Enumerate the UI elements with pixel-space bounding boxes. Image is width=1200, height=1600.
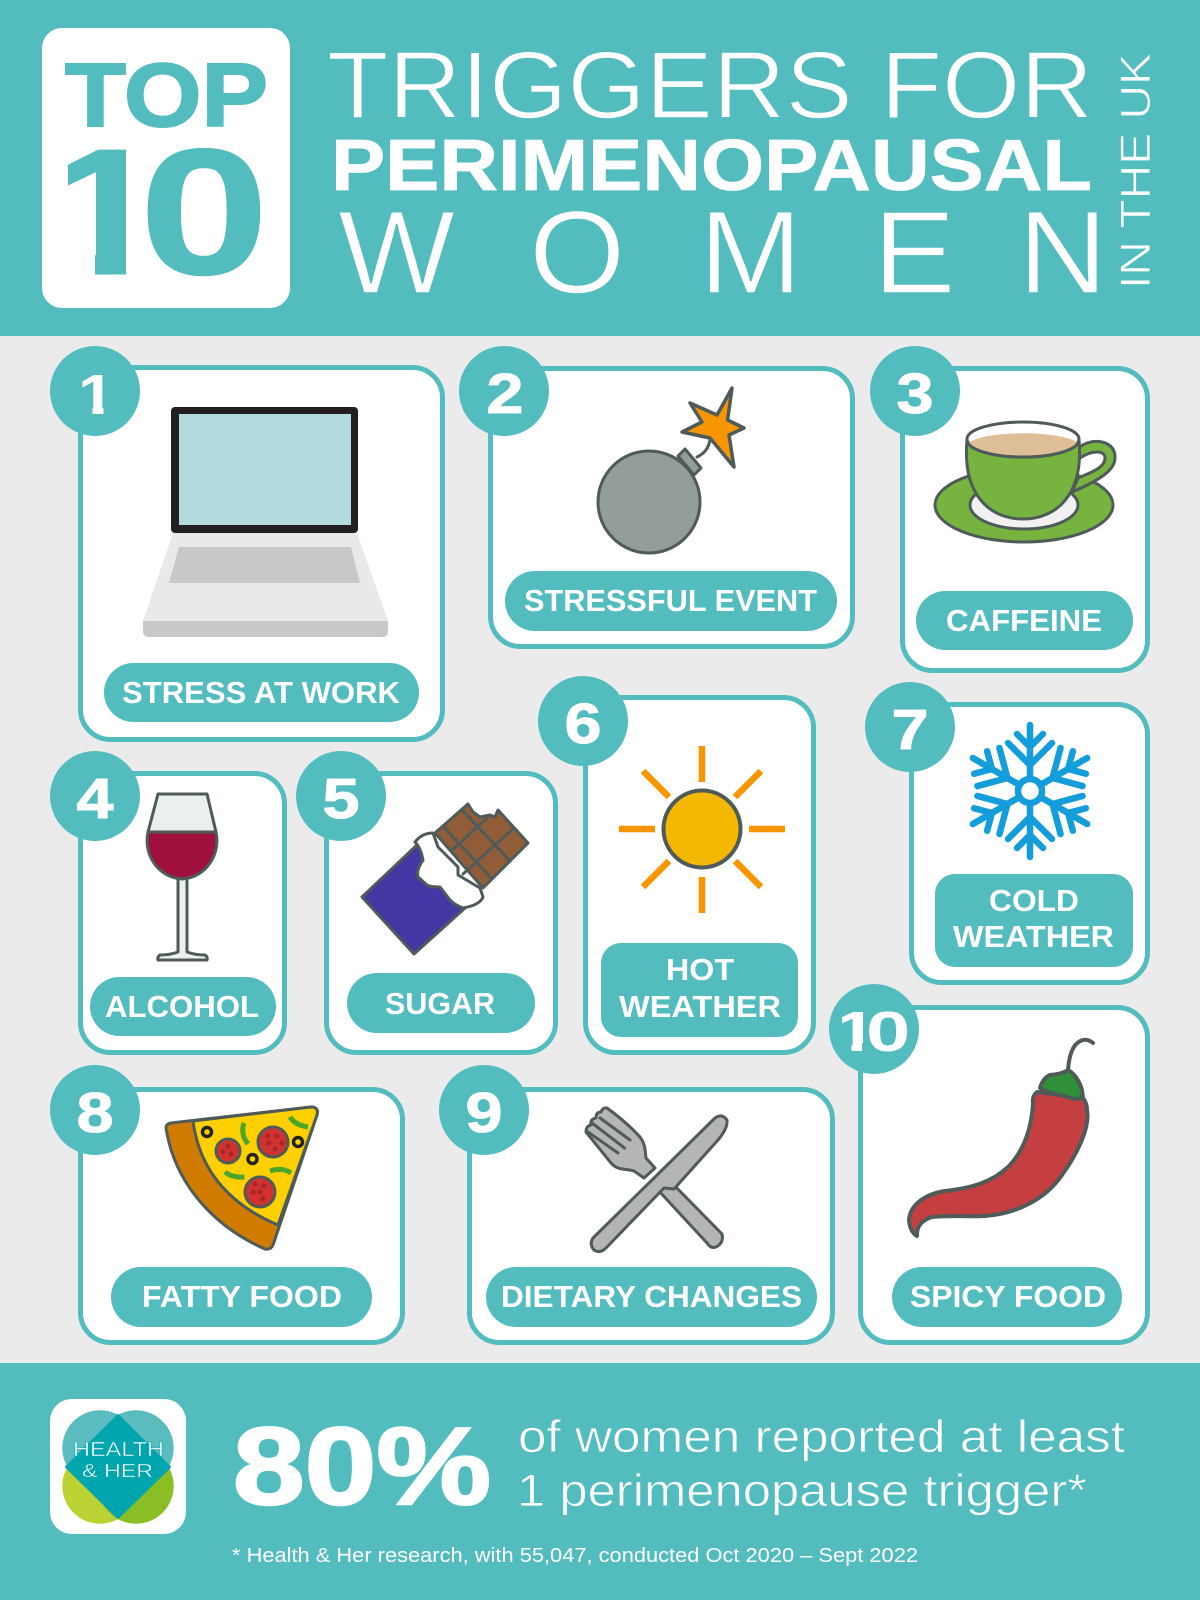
title: WOMEN <box>338 186 1107 318</box>
label <box>90 977 276 1036</box>
icon: wine glass <box>147 794 217 960</box>
label: DIETARY CHANGES <box>501 1279 802 1314</box>
number 5 <box>296 751 386 841</box>
number 6: 6 <box>564 692 602 756</box>
title: TRIGGERS FOR <box>327 32 1093 139</box>
label: STRESSFUL EVENT <box>524 583 817 618</box>
icon: chili pepper <box>909 1040 1093 1236</box>
number 6 <box>538 676 628 766</box>
number 4: 4 <box>76 767 114 831</box>
number 7: 7 <box>892 698 928 762</box>
icon: snowflake <box>962 725 1098 857</box>
icon: laptop <box>143 407 388 637</box>
header banner <box>0 0 1200 336</box>
number 1 <box>50 346 140 436</box>
icon: chocolate bar <box>362 804 528 954</box>
icon: coffee cup <box>935 422 1115 542</box>
logo: health and her <box>50 1399 186 1534</box>
number 10 <box>829 984 919 1074</box>
number 10: 1 <box>834 999 878 1063</box>
number 7 <box>865 682 955 772</box>
top 10 badge <box>42 28 290 313</box>
label: STRESS AT WORK <box>122 675 401 710</box>
in the uk vertical text: IN THE UK <box>1112 53 1160 289</box>
panel: hot weather <box>538 676 814 1052</box>
footer banner <box>0 1363 1200 1600</box>
number 3: 3 <box>896 362 934 426</box>
number 1: 1 <box>78 363 114 427</box>
label <box>111 1267 372 1327</box>
label: CAFFEINE <box>946 603 1102 638</box>
number 10: 0 <box>866 999 910 1063</box>
label: ALCOHOL <box>105 989 259 1024</box>
number 2: 2 <box>486 362 524 426</box>
label <box>104 663 419 722</box>
logo: health and her: HEALTH <box>73 1439 164 1461</box>
panel: spicy food <box>829 984 1148 1342</box>
label: WEATHER <box>953 919 1114 954</box>
number 3 <box>870 346 960 436</box>
panel: dietary changes <box>439 1065 832 1342</box>
number 8: 8 <box>76 1081 114 1145</box>
label: COLD <box>989 883 1079 918</box>
number 9: 9 <box>466 1081 502 1145</box>
label: HOT <box>666 952 734 987</box>
panel: alcohol <box>50 751 284 1052</box>
panel: caffeine <box>870 346 1148 670</box>
statistic: 80%: 80% <box>233 1405 491 1528</box>
number 4 <box>50 751 140 841</box>
label: SPICY FOOD <box>910 1279 1106 1314</box>
panel: cold weather <box>865 682 1148 982</box>
top 10 badge: 0 <box>139 112 269 313</box>
label: FATTY FOOD <box>142 1279 342 1314</box>
statistic description <box>517 1411 1126 1516</box>
panel: stress at work <box>50 346 442 740</box>
top 10 badge: TOP <box>65 46 268 146</box>
statistic description: of women reported at least <box>518 1411 1126 1462</box>
label <box>916 591 1133 650</box>
label <box>935 874 1133 967</box>
panel: fatty food <box>50 1065 402 1342</box>
logo: health and her: & HER <box>82 1461 153 1481</box>
panel: sugar <box>296 751 556 1052</box>
top 10 badge: 1 <box>42 112 172 313</box>
panel: stressful event <box>459 346 852 646</box>
label: SUGAR <box>385 986 495 1021</box>
number 8 <box>50 1065 140 1155</box>
label <box>892 1267 1122 1327</box>
label <box>347 973 535 1033</box>
label <box>505 571 837 631</box>
label: WEATHER <box>619 989 781 1024</box>
label <box>601 943 798 1037</box>
number 5: 5 <box>322 767 360 831</box>
title <box>327 32 1107 318</box>
icon: fork and knife <box>586 1108 727 1252</box>
label <box>486 1267 817 1327</box>
icon: sun <box>619 746 785 913</box>
statistic description: 1 perimenopause trigger* <box>517 1465 1087 1516</box>
icon: pizza slice <box>166 1107 317 1249</box>
number 9 <box>439 1065 529 1155</box>
number 2 <box>459 346 549 436</box>
footnote: * Health & Her research, with 55,047, conducted Oct 2020 – Sept 2022 <box>232 1545 918 1567</box>
title: PERIMENOPAUSAL <box>331 126 1092 206</box>
icon: bomb <box>598 388 744 553</box>
